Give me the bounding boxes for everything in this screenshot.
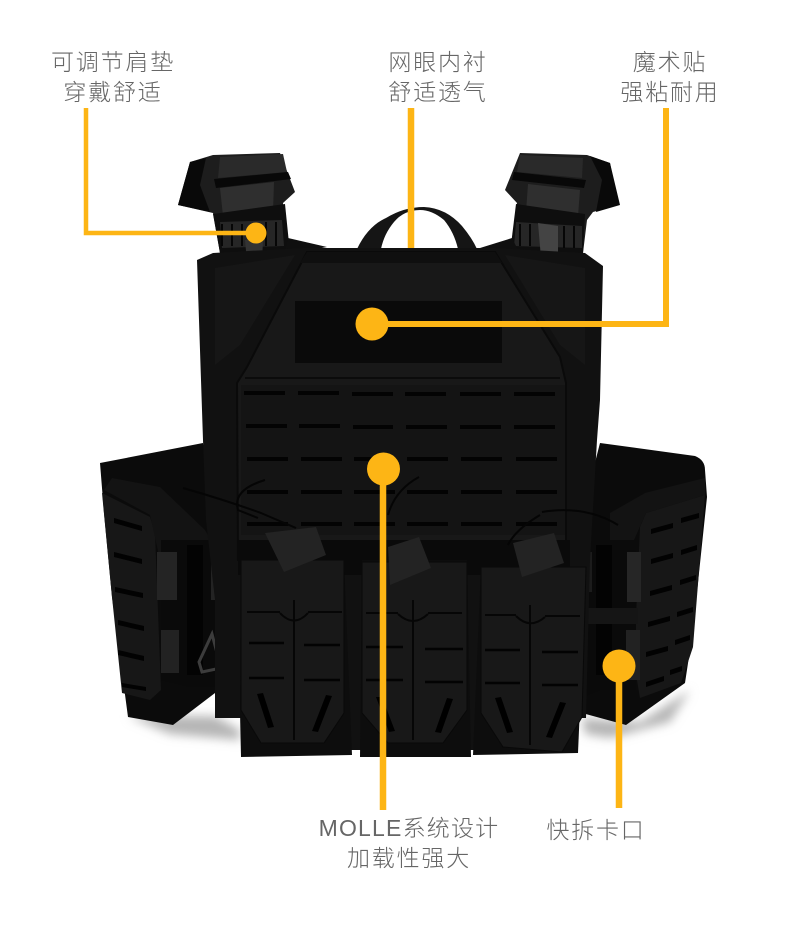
right cummerbund <box>570 443 707 725</box>
shoulder strap: left <box>178 153 295 325</box>
vest illustration <box>100 153 707 757</box>
label: velcro: 魔术贴 <box>633 49 707 75</box>
velcro panel <box>295 301 502 363</box>
ground shadow <box>128 690 690 740</box>
callout: mesh lining leader <box>408 108 414 248</box>
callout: velcro leader <box>356 108 666 340</box>
left buckle assembly <box>157 540 240 687</box>
label: molle system: MOLLE系统设计 <box>319 815 499 841</box>
pouch 1 <box>240 560 352 757</box>
pouch 2 <box>360 560 471 757</box>
left cummerbund <box>100 443 241 725</box>
front panel <box>237 252 566 560</box>
label: mesh lining: 网眼内衬 <box>388 49 488 75</box>
vest main body <box>197 238 603 750</box>
bungee cords <box>183 477 618 545</box>
laser cut slots <box>241 385 565 535</box>
mesh lining handle <box>357 207 477 249</box>
label: quick release buckle: 快拆卡口 <box>546 817 646 843</box>
magazine pouches <box>240 560 586 757</box>
label: mesh lining: 舒适透气 <box>388 79 488 105</box>
callout: quick release leader <box>602 650 636 808</box>
label: adjustable shoulder pad: 穿戴舒适 <box>63 79 163 105</box>
pouch 3 <box>473 567 586 755</box>
right buckle assembly <box>570 545 641 700</box>
label: velcro: 强粘耐用 <box>620 79 720 105</box>
pull tabs <box>265 527 564 585</box>
callout: molle leader <box>367 452 400 810</box>
label: adjustable shoulder pad: 可调节肩垫 <box>51 49 175 75</box>
callout: shoulder pad leader <box>86 108 266 244</box>
shoulder strap: right <box>505 153 620 323</box>
label: molle system: 加载性强大 <box>347 845 471 871</box>
